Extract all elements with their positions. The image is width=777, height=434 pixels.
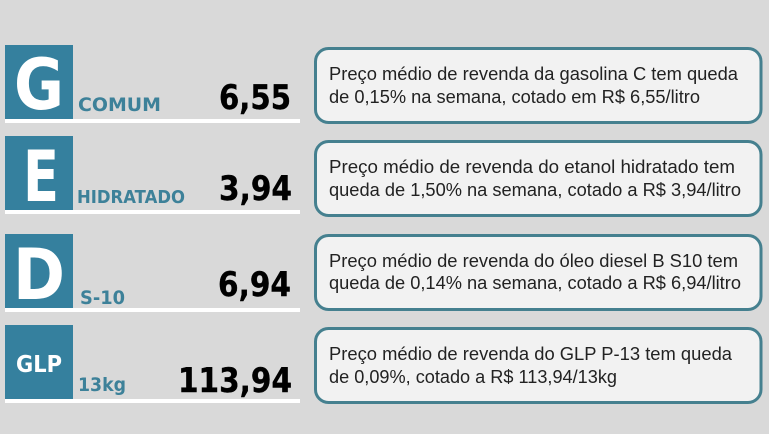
label: 13kg: 13kg <box>78 374 126 396</box>
callout: gasolina: Preço médio de revenda da gasolina C tem queda <box>329 64 739 84</box>
row: glp 13kg <box>5 325 300 403</box>
callout: etanol: Preço médio de revenda do etanol hidratado tem <box>329 157 735 177</box>
callout: gasolina: de 0,15% na semana, cotado em R$ 6,55/litro <box>329 87 700 107</box>
icon: G tile: G <box>14 44 64 126</box>
icon: D tile: D <box>13 234 65 316</box>
row: etanol hidratado <box>5 136 300 218</box>
price: 6,55: 6,55 <box>219 78 291 118</box>
label: s-10: S-10 <box>80 287 125 309</box>
icon: GLP tile <box>5 325 73 399</box>
price: 3,94: 3,94 <box>219 169 292 209</box>
row: gasolina comum <box>5 44 300 126</box>
callout: diesel <box>316 236 761 310</box>
label: hidratado: HIDRATADO <box>77 187 185 208</box>
label: comum: COMUM <box>78 94 161 116</box>
icon: E tile: E <box>23 136 59 218</box>
price: 113,94: 113,94 <box>178 361 292 401</box>
callout: gasolina <box>316 48 761 122</box>
callout: etanol: queda de 1,50% na semana, cotado a R$ 3,94/litro <box>329 180 741 200</box>
icon: GLP tile: GLP <box>16 352 62 378</box>
callout: etanol <box>316 142 761 216</box>
callout: diesel: queda de 0,14% na semana, cotado a R$ 6,94/litro <box>329 273 741 293</box>
callout: glp: Preço médio de revenda do GLP P-13 tem queda <box>329 344 733 364</box>
callout: glp: de 0,09%, cotado a R$ 113,94/13kg <box>329 367 617 387</box>
row: diesel s-10 <box>5 234 300 316</box>
price: 6,94: 6,94 <box>218 265 291 305</box>
callout: diesel: Preço médio de revenda do óleo diesel B S10 tem <box>329 251 738 271</box>
callout: glp <box>316 328 761 402</box>
